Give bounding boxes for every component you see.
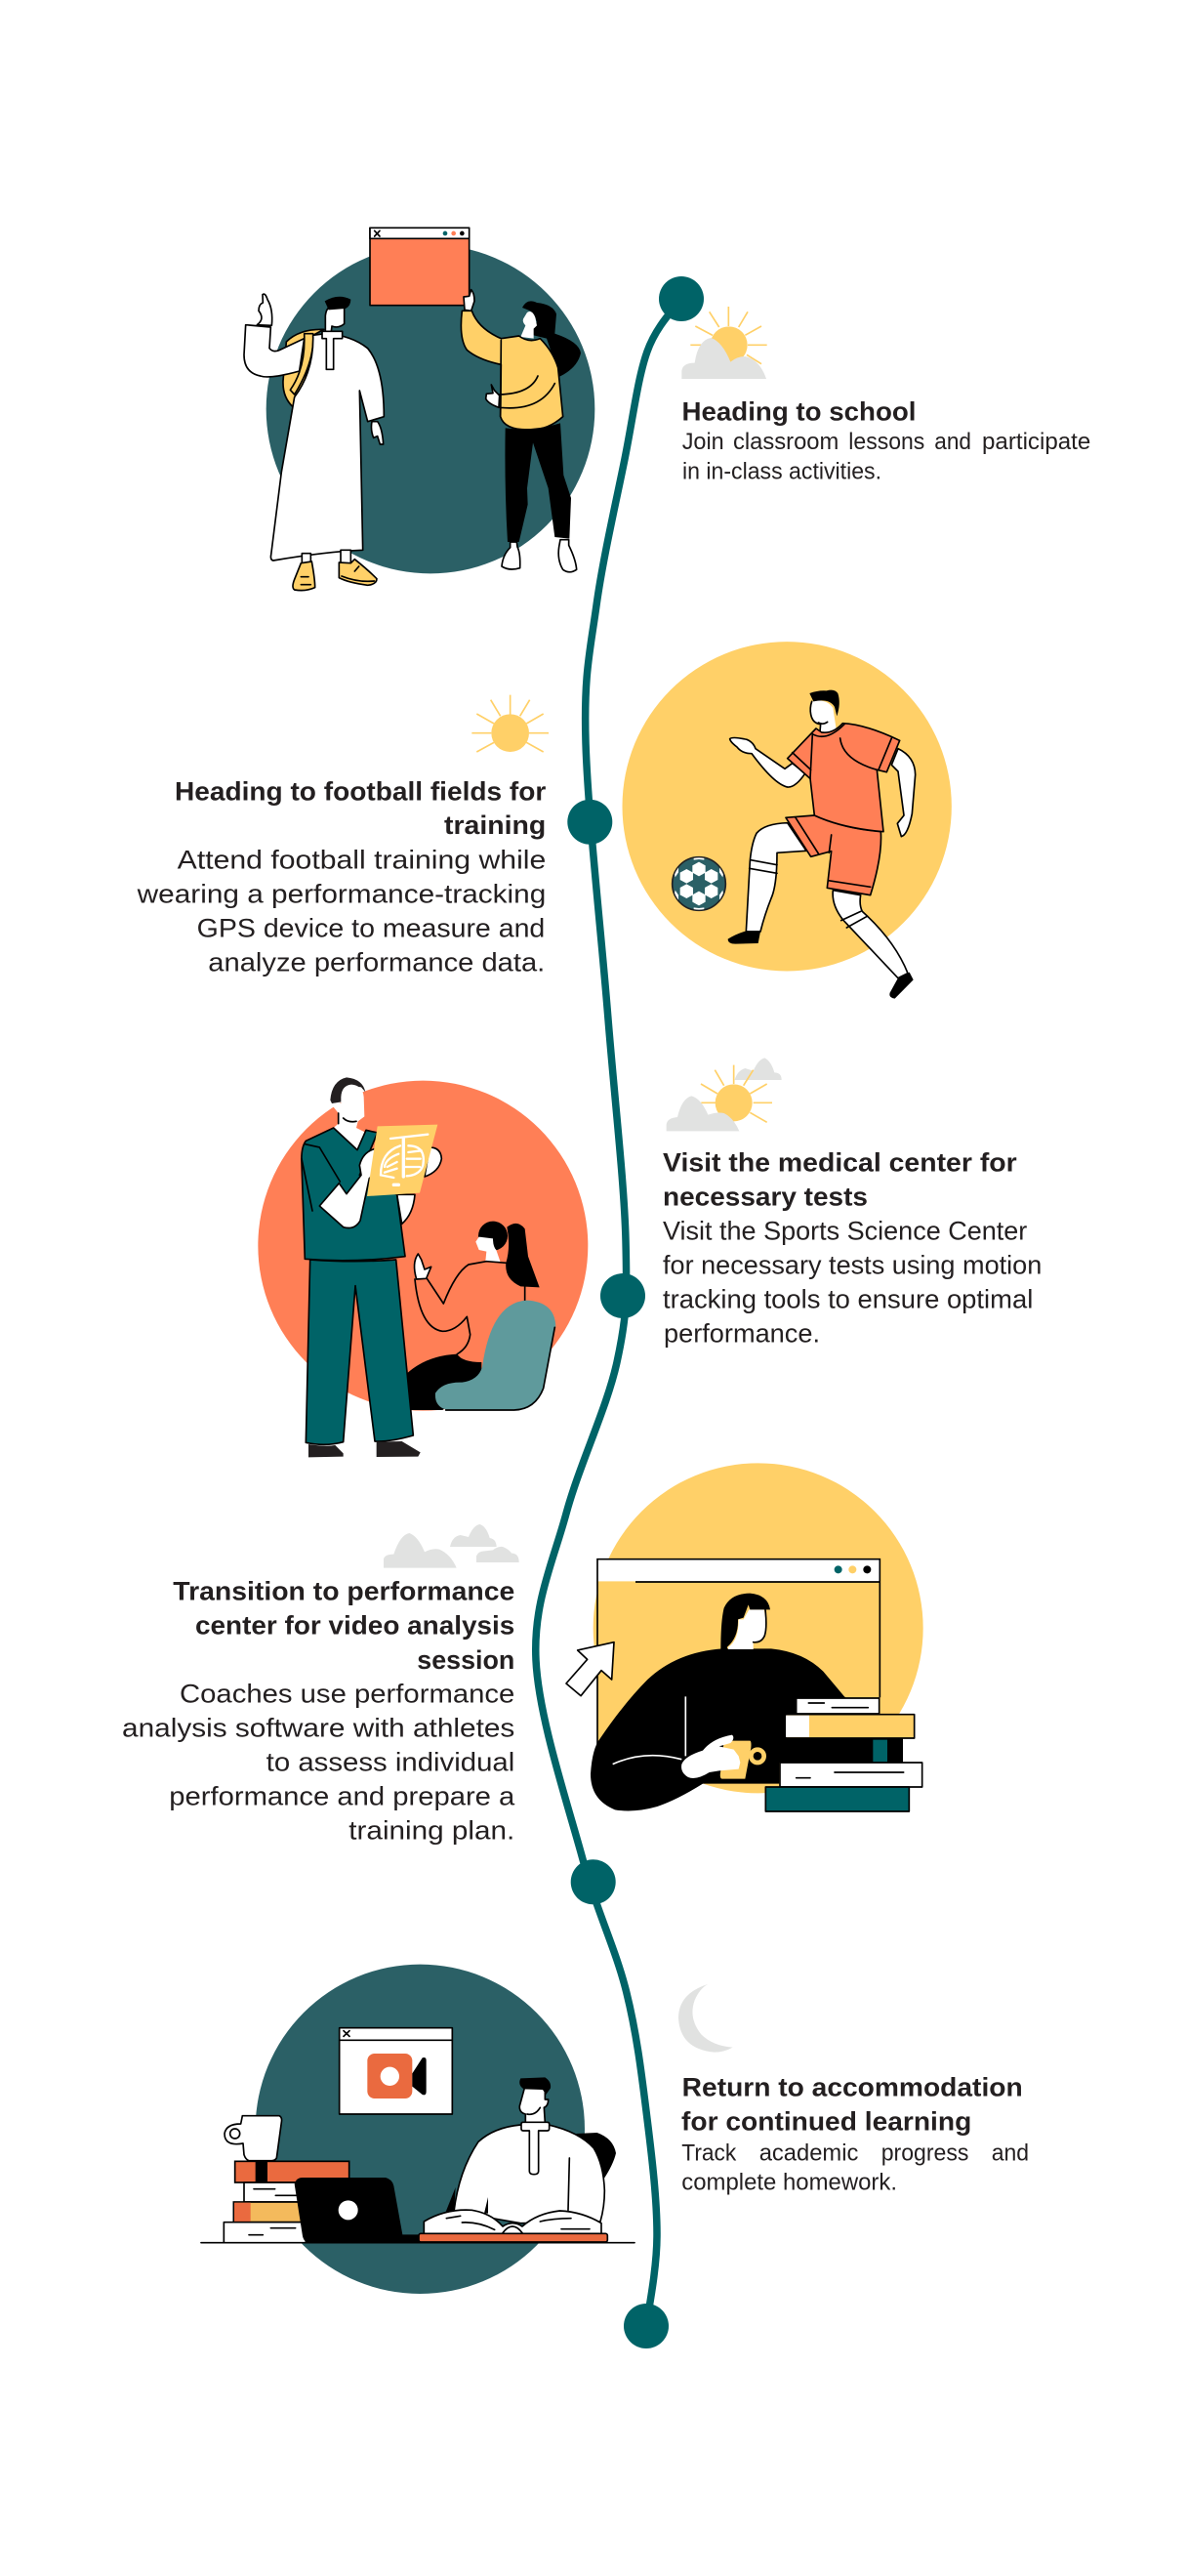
illustration: man reading at desk — [201, 1965, 634, 2294]
panel: return to accommodation — [201, 1965, 1029, 2294]
body text: Coaches use performance — [180, 1680, 514, 1709]
body text: Join — [682, 429, 724, 455]
icon: crescent moon — [678, 1984, 733, 2053]
body text: and — [992, 2140, 1029, 2167]
body text: Track — [681, 2140, 737, 2167]
timeline dots — [567, 276, 704, 2348]
body text: classroom — [733, 429, 839, 455]
heading: football fields — [175, 776, 547, 840]
body text — [681, 2140, 1029, 2196]
body text — [682, 429, 1090, 485]
heading: performance center: center for video analysis — [195, 1610, 514, 1640]
illustration: student and woman with window — [244, 228, 594, 591]
body text: training plan. — [348, 1816, 514, 1846]
body text — [663, 1216, 1042, 1348]
body text: tracking tools to ensure optimal — [663, 1284, 1033, 1313]
illustration: woman at window with books — [566, 1463, 923, 1811]
icon: sun behind cloud — [681, 307, 767, 379]
body text: and — [934, 429, 971, 455]
panel: heading to school — [244, 228, 1090, 591]
icon: football — [673, 856, 725, 911]
body text: Visit the Sports Science Center — [663, 1216, 1027, 1245]
heading: return to accommodation: Return to accommodation — [682, 2073, 1023, 2102]
panel: medical center — [258, 1058, 1042, 1457]
body text: wearing a performance-tracking — [137, 879, 546, 908]
body text: progress — [881, 2140, 968, 2167]
body text: performance and prepare a — [169, 1782, 515, 1811]
heading: performance center: Transition to performance — [173, 1576, 514, 1605]
heading: heading to school: Heading to school — [681, 397, 916, 427]
illustration: football player — [622, 642, 952, 999]
panel: performance center — [122, 1463, 923, 1846]
body text: participate — [982, 429, 1090, 455]
heading: return to accommodation: for continued learning — [681, 2107, 971, 2137]
illustration: doctor and seated woman — [258, 1077, 588, 1457]
body text — [122, 1680, 515, 1846]
body text: academic — [759, 2140, 858, 2167]
heading: medical center: necessary tests — [663, 1183, 868, 1212]
icon: sun — [471, 695, 549, 752]
body text: Attend football training while — [178, 845, 546, 874]
heading: football fields: Heading to football fields for — [175, 776, 547, 806]
icon: sun and clouds — [667, 1058, 782, 1131]
heading: return to accommodation — [681, 2073, 1023, 2137]
infographic canvas — [123, 227, 1089, 2348]
heading: medical center — [663, 1147, 1017, 1212]
body text: lessons — [848, 429, 924, 455]
body text: complete homework. — [681, 2170, 897, 2196]
icon: clouds — [384, 1524, 519, 1568]
body text: GPS device to measure and — [197, 913, 545, 942]
heading: football fields: training — [444, 810, 546, 840]
body text: for necessary tests using motion — [663, 1250, 1042, 1279]
heading: performance center — [173, 1576, 514, 1675]
panel: heading to football fields — [137, 642, 952, 999]
body text: analyze performance data. — [208, 947, 545, 976]
body text: performance. — [664, 1318, 820, 1348]
heading: performance center: session — [417, 1645, 514, 1675]
body text: analysis software with athletes — [122, 1714, 514, 1743]
body text: to assess individual — [266, 1748, 514, 1777]
body text: in in-class activities. — [682, 459, 881, 485]
body text — [137, 845, 546, 976]
timeline curve — [536, 299, 681, 2326]
heading: medical center: Visit the medical center for — [663, 1147, 1017, 1177]
